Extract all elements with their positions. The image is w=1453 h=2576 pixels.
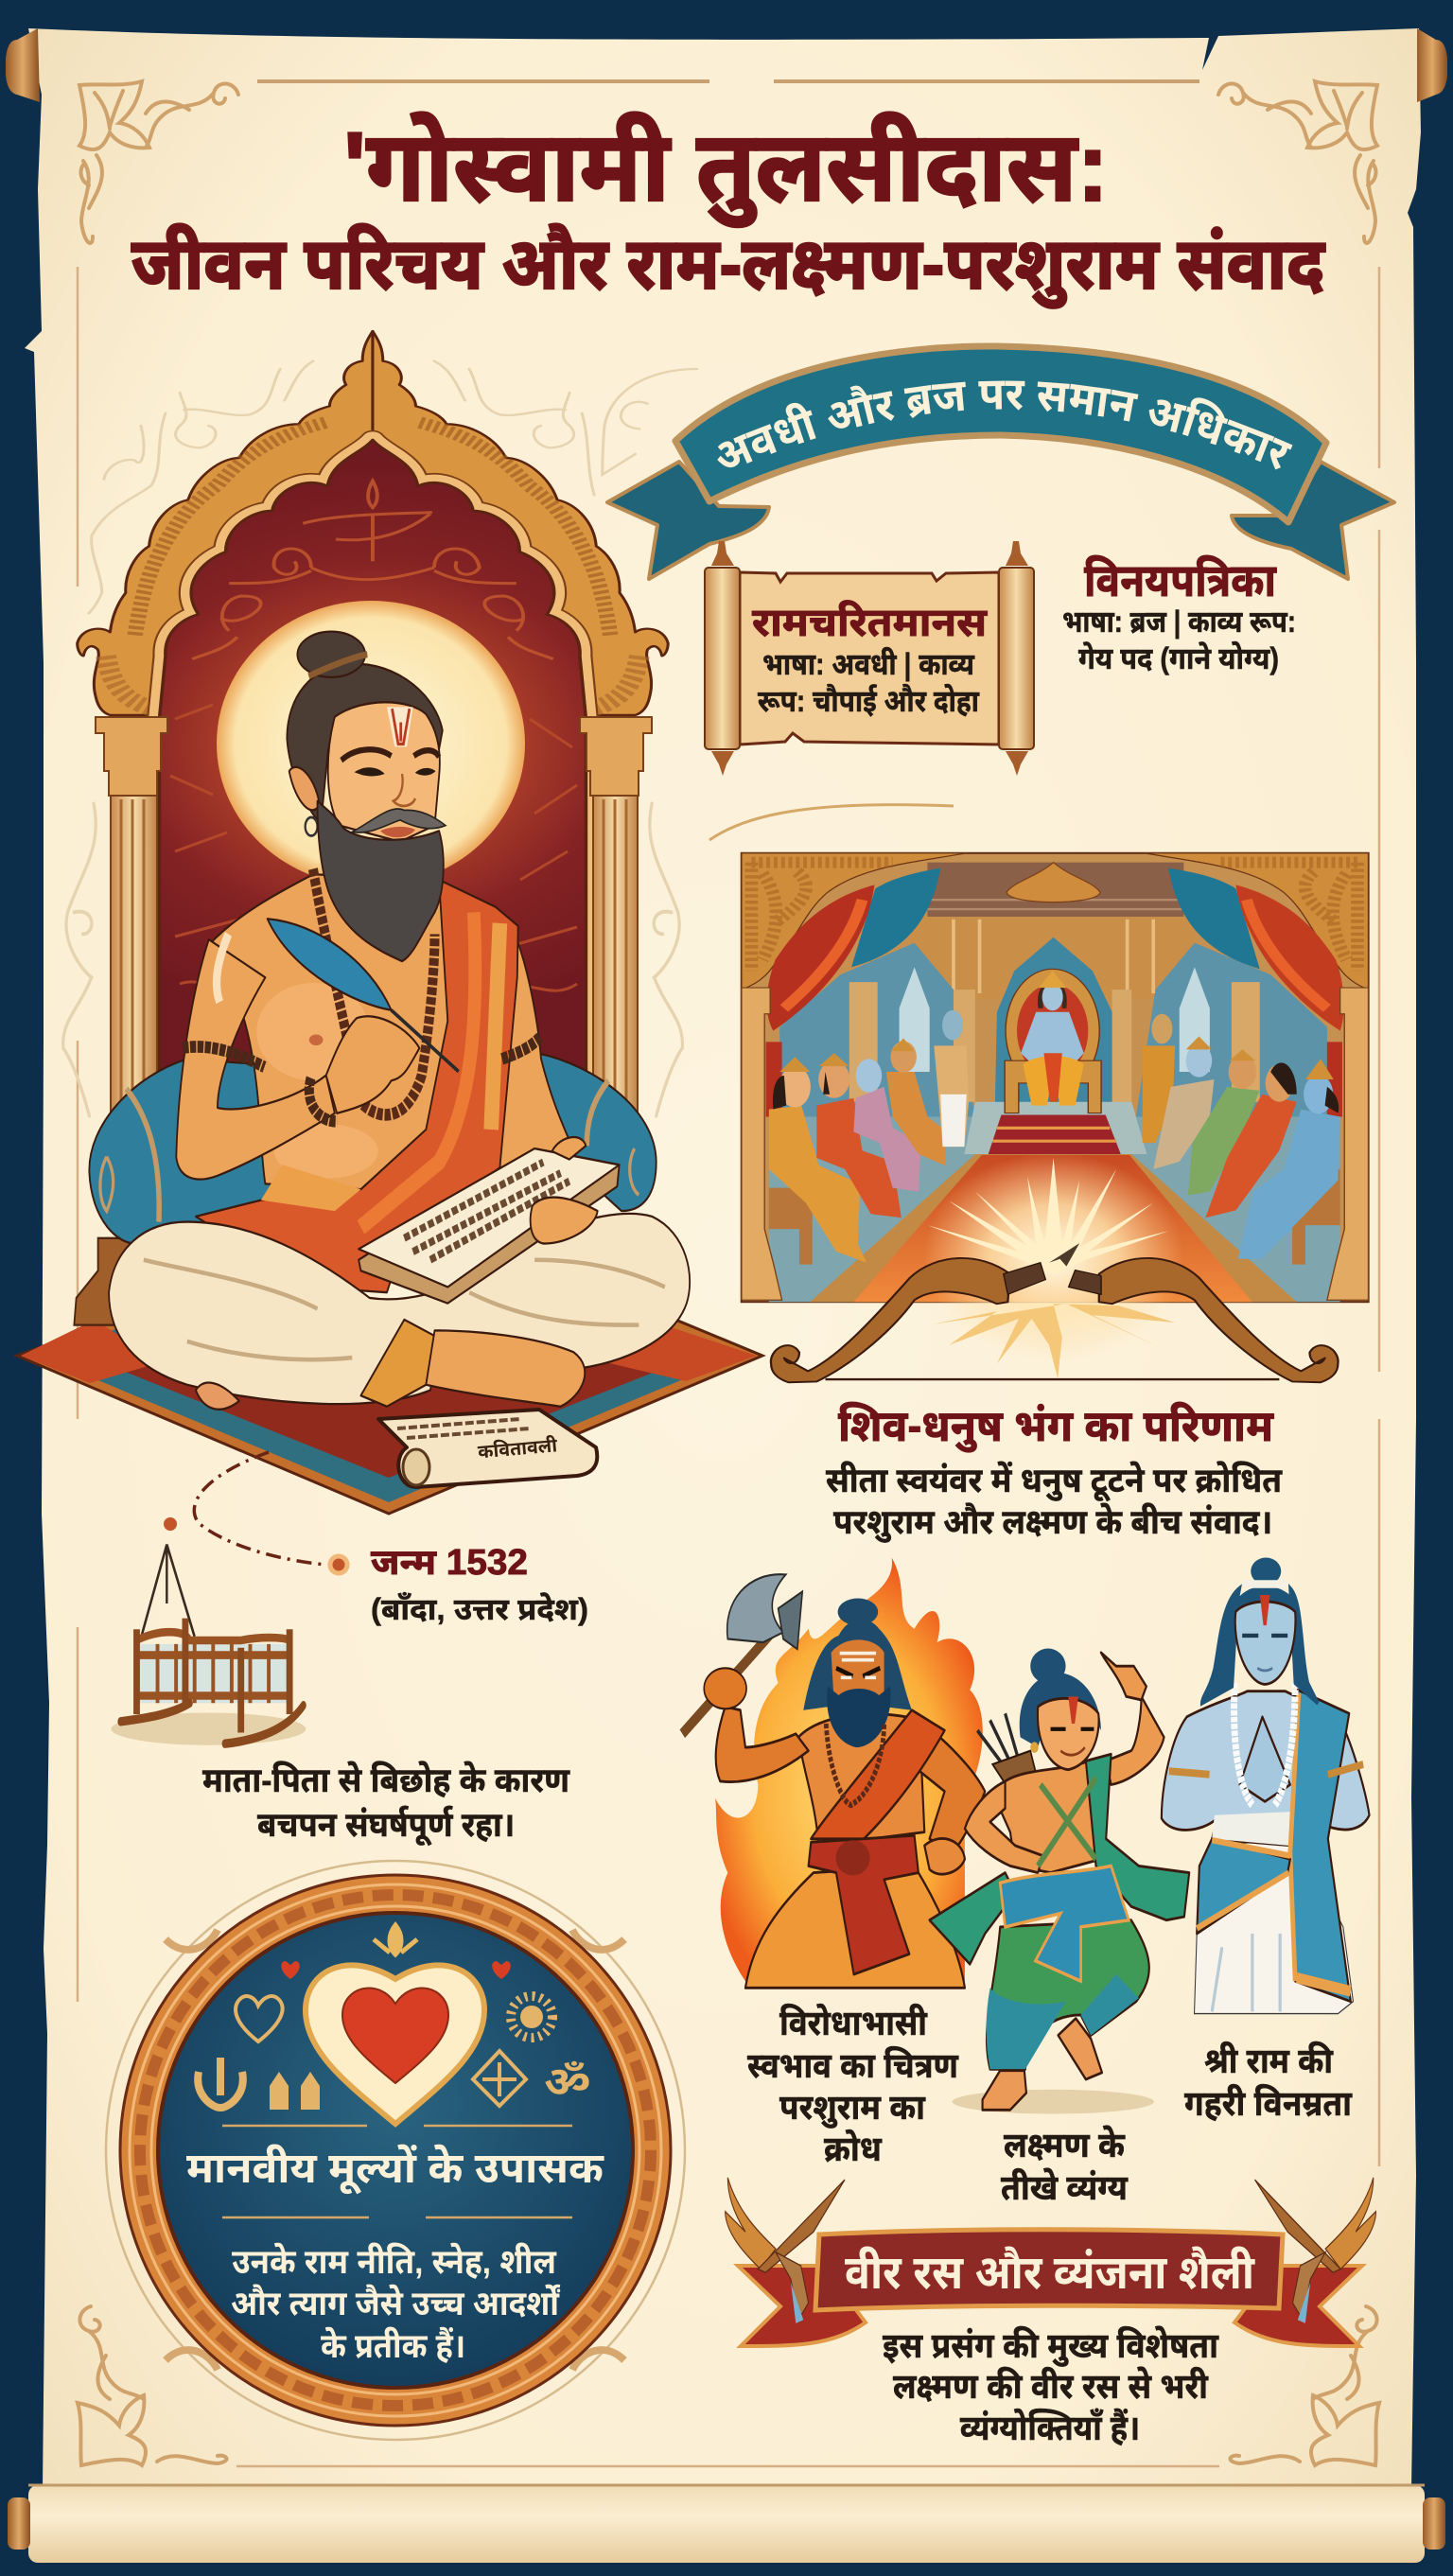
icon: sun	[511, 1996, 552, 2038]
arch outer right	[373, 331, 668, 741]
panel markings	[170, 705, 577, 993]
birth text: जन्म 1532	[371, 1543, 528, 1583]
raised arm	[716, 1707, 809, 1782]
spandrel filigree	[751, 863, 1357, 971]
red ribbon banner	[726, 2178, 1375, 2346]
parashurama caption: क्रोध	[824, 2129, 883, 2168]
arch frame	[78, 331, 668, 1142]
hair	[287, 664, 443, 820]
torso	[209, 874, 569, 1189]
right niche	[1136, 943, 1327, 1117]
flames	[715, 1558, 983, 1981]
blue waist cloth	[1000, 1866, 1129, 1981]
right bow limb	[1099, 1258, 1339, 1382]
medallion body: उनके राम नीति, स्नेह, शील	[232, 2241, 557, 2281]
vinayapatrika: भाषा: ब्रज | काव्य रूप:	[1062, 605, 1296, 639]
bun	[297, 632, 365, 677]
right spandrel	[1145, 853, 1369, 990]
left niche	[779, 943, 975, 1117]
lower dhoti	[1195, 1839, 1353, 2014]
burst rays	[927, 1158, 1168, 1274]
veer ras text: लक्ष्मण की वीर रस से भरी	[893, 2366, 1209, 2406]
carpet	[853, 1155, 1252, 1302]
lakshmana caption: लक्ष्मण के	[1004, 2125, 1126, 2164]
forehead mark	[387, 707, 413, 746]
scroll text: रूप: चौपाई और दोहा	[758, 684, 980, 718]
left arm	[965, 1781, 1043, 1873]
scroll heading: रामचरितमानस	[752, 600, 988, 644]
arm	[176, 939, 335, 1180]
corner ornament top-right	[1218, 81, 1377, 243]
left shard	[1004, 1263, 1045, 1294]
ramcharitmanas scroll	[705, 541, 1034, 776]
cradle	[112, 1545, 306, 1745]
lakshmana caption	[1001, 2125, 1129, 2207]
right knob	[1423, 2497, 1445, 2550]
earring	[306, 817, 318, 835]
medallion body: और त्याग जैसे उच्च आदर्शों	[231, 2283, 561, 2322]
ribbon text: अवधी और ब्रज पर समान अधिकार	[717, 380, 1292, 469]
rama on throne	[1021, 971, 1084, 1106]
right rod	[999, 541, 1034, 776]
arrows	[977, 1713, 1023, 1781]
top-left roller	[6, 28, 40, 102]
right red curtain	[1235, 885, 1344, 1031]
parashurama caption: स्वभाव का चित्रण	[747, 2046, 959, 2085]
beard	[318, 801, 444, 961]
hair	[803, 1620, 912, 1710]
values medallion	[106, 1861, 685, 2440]
pointing hand	[1101, 1653, 1147, 1700]
legs and feet	[983, 2019, 1102, 2110]
right column	[593, 796, 638, 1117]
seats	[769, 1169, 1340, 1265]
bow section text: परशुराम और लक्ष्मण के बीच संवाद।	[833, 1501, 1272, 1543]
throne	[1006, 969, 1099, 1093]
ankle band	[360, 1320, 435, 1407]
icon: knot	[473, 2051, 526, 2106]
white chest cloth	[1212, 1812, 1290, 1846]
face	[1038, 1698, 1099, 1770]
book hand	[531, 1137, 598, 1244]
bead necklace	[313, 868, 435, 1114]
flourish	[709, 805, 954, 840]
birth text: (बाँदा, उत्तर प्रदेश)	[371, 1591, 588, 1626]
left blue curtain	[851, 868, 940, 967]
ribbon text: वीर रस और व्यंजना शैली	[845, 2246, 1255, 2299]
smile	[1060, 1747, 1085, 1755]
lower burst rays	[932, 1304, 1175, 1378]
throne seat	[1005, 1060, 1101, 1113]
bow string	[826, 1376, 1279, 1382]
corner ornament top-left	[79, 81, 238, 243]
icon: outline heart	[236, 1996, 283, 2042]
grey steps	[964, 1102, 1147, 1154]
ribbon body	[815, 2230, 1283, 2310]
broken shiva bow	[771, 1243, 1339, 1382]
bow section heading: शिव-धनुष भंग का परिणाम	[838, 1401, 1274, 1452]
left red curtain	[767, 885, 874, 1031]
seated courtiers left	[769, 1010, 969, 1263]
carpet border	[810, 1154, 1297, 1302]
earring	[1030, 1742, 1039, 1753]
moustache	[352, 809, 446, 832]
faint ornaments behind arch	[89, 361, 697, 613]
face	[328, 702, 440, 842]
tilak	[393, 709, 410, 744]
topknot	[838, 1599, 878, 1625]
lakshmana caption: तीखे व्यंग्य	[1001, 2167, 1129, 2207]
rama caption: श्री राम की	[1204, 2041, 1334, 2080]
poet figure	[74, 632, 690, 1410]
ring	[120, 1875, 671, 2426]
dhoti folds	[1212, 1934, 1280, 2011]
nose	[394, 774, 415, 806]
scroll text: भाषा: अवधी | काव्य	[762, 647, 975, 681]
burst glow	[923, 1152, 1183, 1361]
red sash	[809, 1835, 919, 1974]
beads	[826, 1724, 884, 1805]
chest highlight	[256, 983, 370, 1080]
parashurama caption	[747, 2004, 959, 2168]
vinayapatrika: विनयपत्रिका	[1084, 555, 1277, 606]
icon: khanda	[198, 2058, 243, 2108]
bow section text	[826, 1460, 1283, 1543]
arch outer left	[78, 331, 373, 741]
face	[1235, 1602, 1296, 1684]
dividers	[222, 2126, 572, 2217]
mouth	[1257, 1668, 1272, 1671]
left scarf	[930, 1873, 1015, 1964]
right pillar	[1327, 988, 1369, 1300]
parashurama caption: परशुराम का	[779, 2088, 926, 2129]
leaves above heart	[374, 1925, 417, 1954]
ear	[289, 767, 320, 810]
childhood text: बचपन संघर्षपूर्ण रहा।	[257, 1805, 515, 1846]
bun	[1251, 1558, 1281, 1585]
childhood text: माता-पिता से बिछोह के कारण	[202, 1760, 570, 1799]
ceiling	[927, 863, 1183, 919]
medallion body	[231, 2241, 561, 2365]
raised arm	[1106, 1696, 1164, 1784]
face	[832, 1639, 884, 1696]
lower left leg tone	[987, 1974, 1139, 2069]
fist	[924, 1838, 965, 1874]
faint ornaments beside pillars	[63, 804, 682, 1116]
hair	[1020, 1673, 1101, 1747]
eyes	[1242, 1633, 1287, 1638]
ribbon right tail	[1232, 462, 1394, 579]
legs robe	[745, 1866, 965, 1988]
title	[131, 112, 1325, 308]
tilak	[1260, 1595, 1270, 1625]
title line 2: जीवन परिचय और राम-लक्ष्मण-परशुराम संवाद	[131, 224, 1325, 308]
hair	[1202, 1588, 1318, 1704]
blue stole	[1290, 1690, 1351, 2002]
rama caption: गहरी विनम्रता	[1184, 2084, 1353, 2123]
panel base	[742, 853, 1369, 1302]
childhood text	[202, 1760, 570, 1846]
nipple	[309, 1035, 323, 1045]
ribbon body	[675, 346, 1326, 522]
bottom roller	[8, 2485, 1445, 2563]
eyes	[355, 767, 435, 776]
foot	[426, 1330, 585, 1407]
parashurama figure	[682, 1558, 985, 1988]
left column	[111, 796, 157, 1117]
corner ornament bottom-left	[78, 2306, 226, 2465]
scroll paper	[740, 572, 999, 745]
pilasters	[849, 982, 1260, 1102]
garland	[1234, 1683, 1295, 1805]
teal arched ribbon	[605, 342, 1396, 581]
rama caption	[1184, 2041, 1353, 2123]
scroll text	[758, 647, 980, 718]
right capital	[580, 717, 652, 796]
bow fragment	[1049, 1243, 1079, 1267]
eyes	[1051, 1726, 1094, 1732]
praying hands	[1240, 1717, 1290, 1801]
hand	[704, 1668, 746, 1709]
court scene	[742, 853, 1369, 1361]
bun tie	[308, 655, 367, 676]
right winged arrow	[1255, 2178, 1375, 2323]
top-right roller	[1417, 28, 1447, 102]
lips	[380, 827, 415, 837]
arch carving	[134, 423, 610, 637]
parashurama caption: विरोधाभासी	[779, 2004, 928, 2042]
veer ras text	[883, 2325, 1219, 2447]
brows and eyes	[836, 1668, 880, 1676]
floor	[769, 1117, 1340, 1302]
icon: om: ॐ	[544, 2059, 591, 2106]
axe	[682, 1574, 802, 1734]
left tail	[738, 2266, 866, 2346]
forehead marks	[840, 1654, 876, 1660]
bolster knots	[100, 1148, 639, 1211]
vinayapatrika: गेय पद (गाने योग्य)	[1078, 641, 1279, 675]
left foot	[196, 1383, 239, 1410]
seated courtiers right	[1143, 1014, 1340, 1259]
torso	[995, 1761, 1101, 1873]
throne base	[74, 1238, 135, 1325]
lowered arm	[917, 1720, 985, 1852]
waist cloth	[1197, 1839, 1290, 1934]
right shard	[1069, 1270, 1101, 1294]
torso and arms	[1162, 1691, 1370, 1846]
bolster left	[89, 1059, 283, 1244]
right tail	[1234, 2266, 1362, 2346]
shawl	[811, 1710, 945, 1839]
left bow limb	[771, 1258, 1010, 1382]
left spandrel	[742, 853, 967, 990]
left rod	[705, 541, 740, 776]
bolster right	[539, 1054, 656, 1211]
brows	[341, 749, 439, 761]
left capital	[96, 717, 167, 796]
flower band	[1242, 1580, 1287, 1588]
medallion heading: मानवीय मूल्यों के उपासक	[186, 2144, 605, 2195]
halo	[217, 601, 525, 886]
cross belts	[1038, 1778, 1096, 1866]
back wall ornament	[910, 917, 1197, 999]
book	[359, 1148, 620, 1304]
gold armlets	[1169, 1764, 1363, 1775]
lakshmana figure	[930, 1649, 1189, 2114]
rama figure	[1162, 1558, 1370, 2014]
thin outer ring	[106, 1861, 685, 2440]
left pillar	[742, 988, 782, 1300]
tilak	[1068, 1696, 1078, 1724]
left winged arrow	[726, 2178, 845, 2323]
quiver	[992, 1751, 1038, 1792]
veer ras text: व्यंग्योक्तियाँ हैं।	[959, 2408, 1140, 2447]
icon: bottles	[270, 2072, 320, 2110]
quill	[268, 919, 392, 1010]
panel calligraphy	[192, 481, 553, 659]
right scarf	[1086, 1754, 1189, 1920]
red steps	[989, 1115, 1121, 1154]
birth dotted path	[164, 1452, 347, 1573]
red heart	[342, 1988, 448, 2083]
small red hearts	[281, 1961, 511, 1979]
kavitavali scroll	[378, 1410, 597, 1487]
medallion corners	[166, 1930, 624, 2370]
trousers	[987, 1920, 1149, 2069]
torso	[798, 1714, 924, 1846]
central niche	[995, 938, 1112, 1117]
left knob	[8, 2497, 30, 2550]
large heart frame	[306, 1965, 484, 2124]
arch inner band and red panel	[159, 440, 586, 1142]
title line 1: 'गोस्वामी तुलसीदास:	[343, 112, 1109, 227]
scroll label: कवितावली	[477, 1433, 559, 1463]
medallion body: के प्रतीक हैं।	[321, 2325, 465, 2365]
dhoti	[109, 1214, 690, 1404]
ground shadow	[953, 2090, 1154, 2114]
lamp	[1007, 863, 1100, 902]
veer ras text: इस प्रसंग की मुख्य विशेषता	[883, 2325, 1219, 2367]
bow section text: सीता स्वयंवर में धनुष टूटने पर क्रोधित	[826, 1460, 1283, 1501]
beard	[827, 1687, 891, 1747]
vinayapatrika	[1062, 555, 1296, 675]
corner ornament bottom-right	[1231, 2306, 1379, 2465]
ribbon left tail	[607, 462, 769, 579]
birth text	[371, 1543, 588, 1626]
sash	[196, 880, 518, 1292]
bun	[1030, 1649, 1066, 1684]
carpet	[17, 1310, 762, 1514]
armlets and wristlet	[183, 1037, 540, 1121]
right blue curtain	[1168, 868, 1260, 969]
writing hand	[326, 1016, 419, 1113]
